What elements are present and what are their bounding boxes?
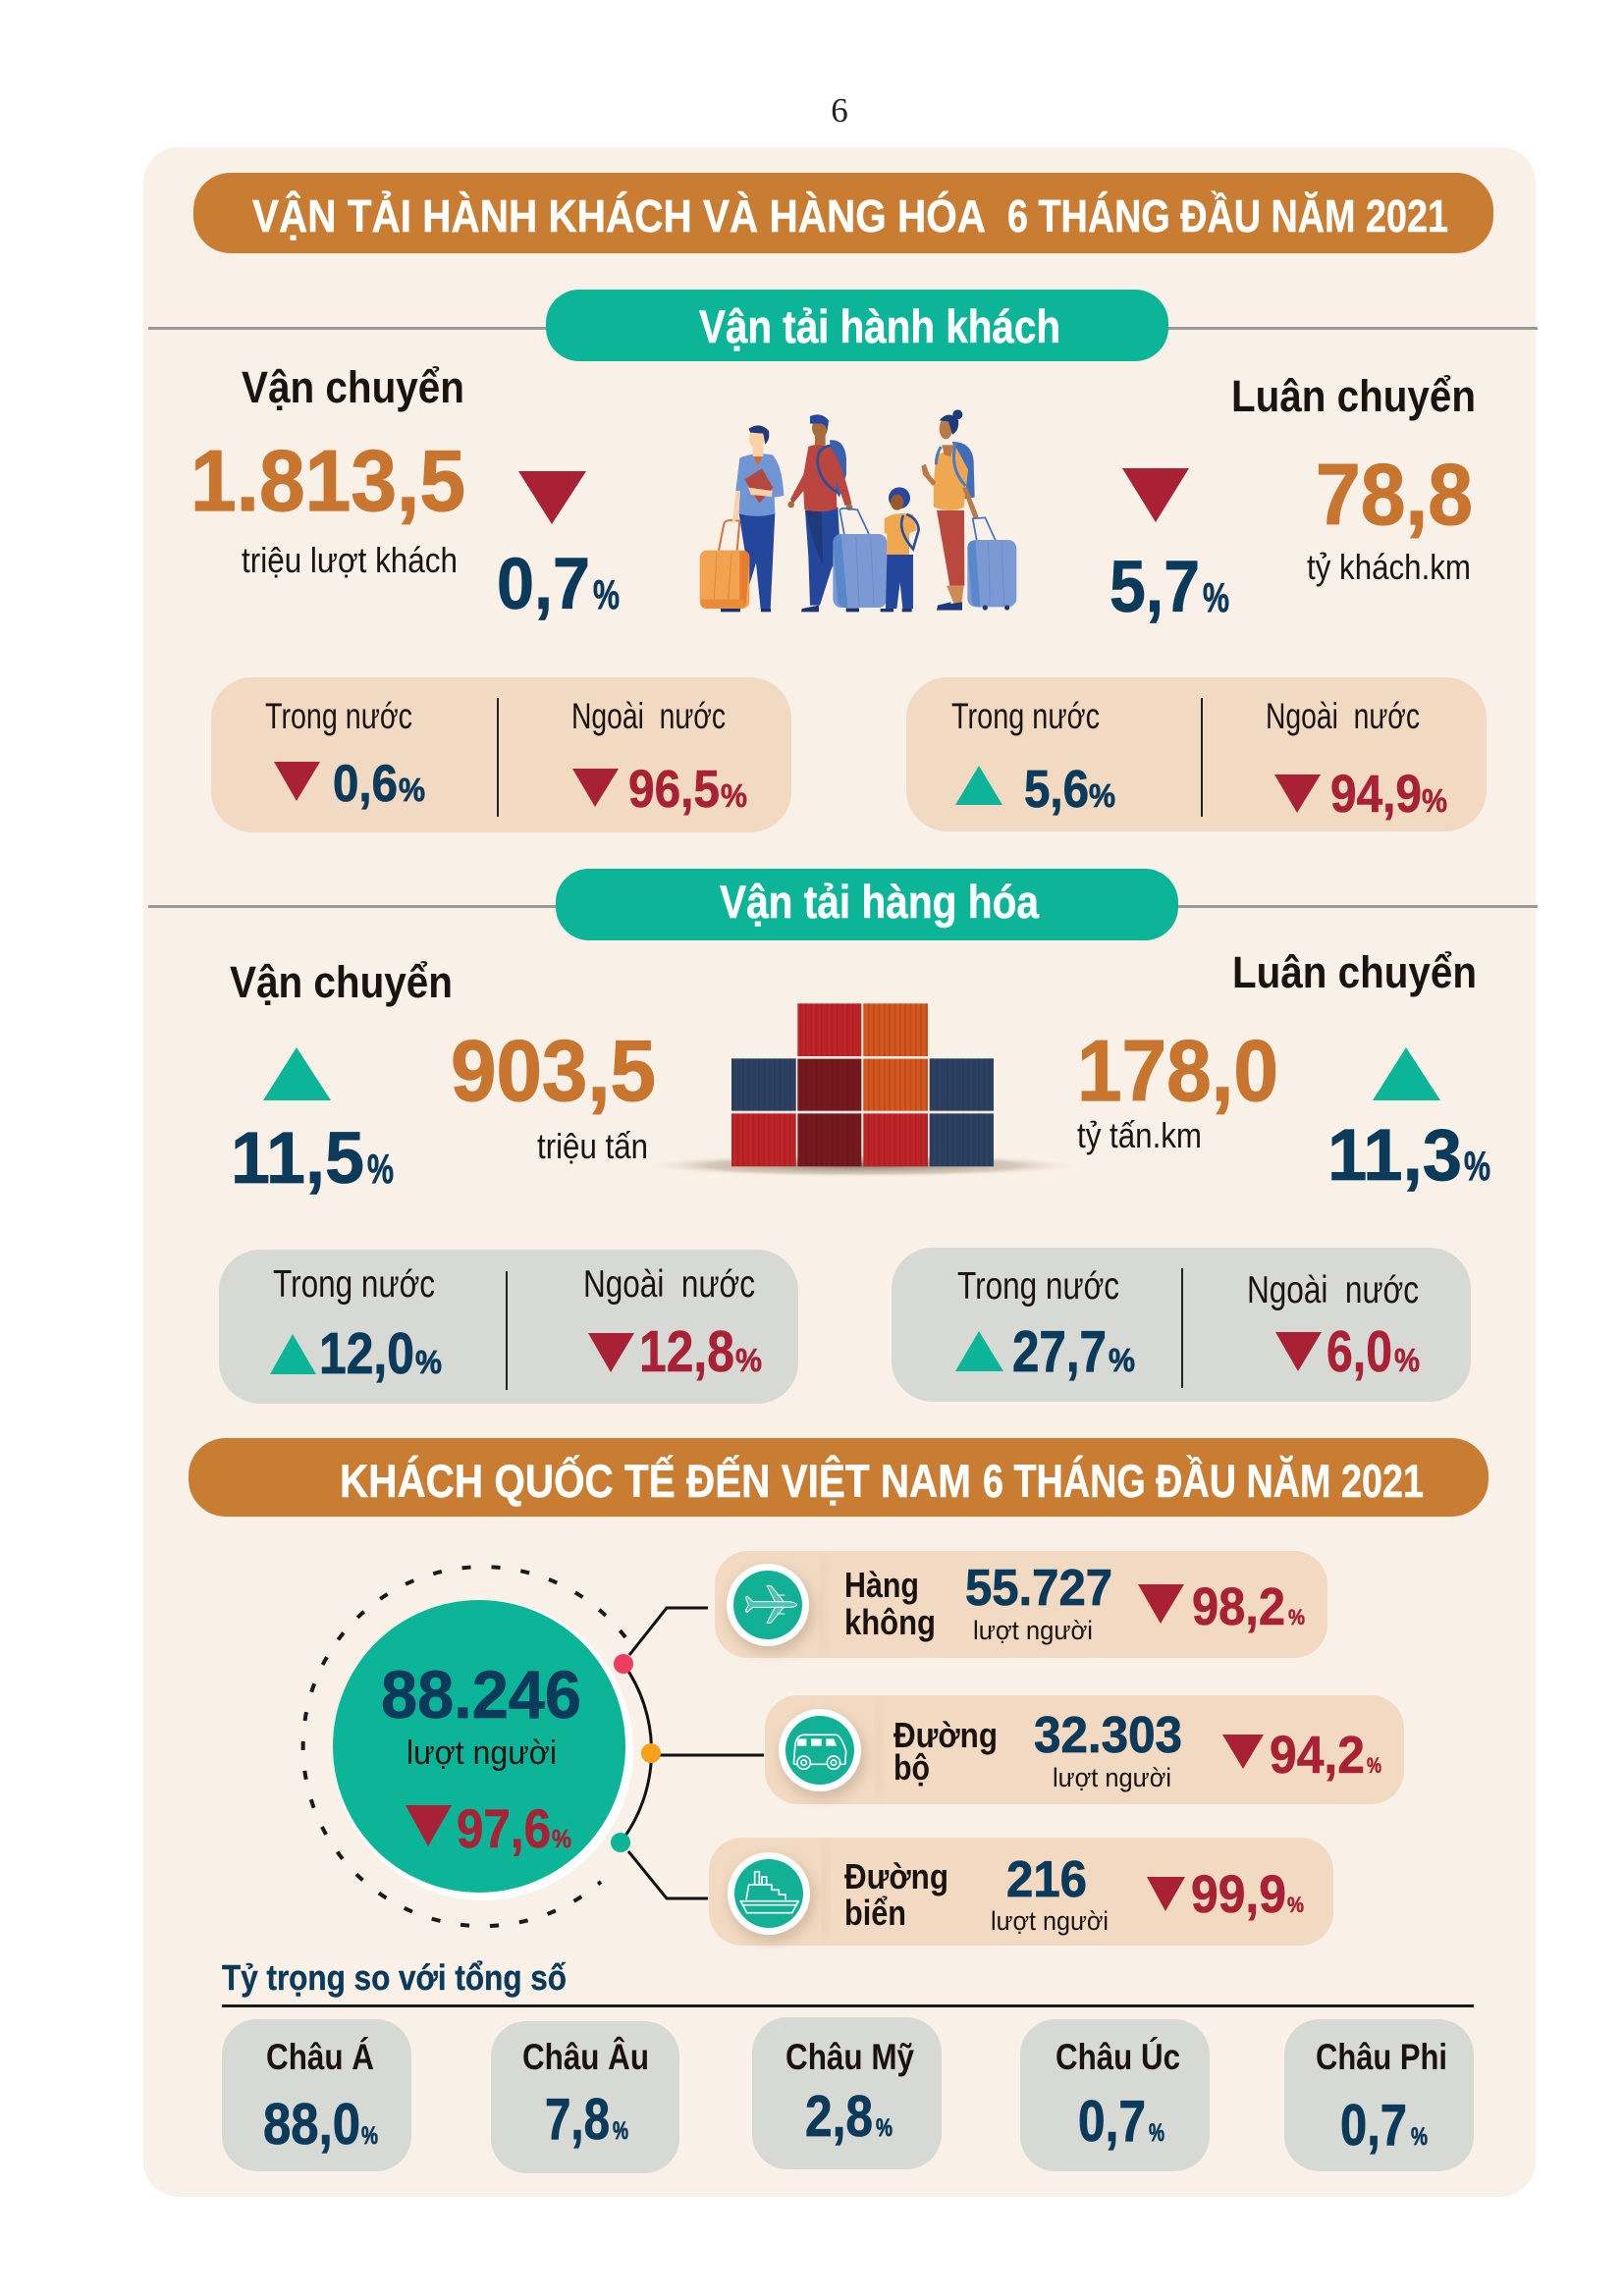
panel: sea transport: lượt người [991,1906,1109,1936]
chart: total visitors circle with connectors: % [552,1824,571,1853]
panel: sea transport: 99,9 [1191,1865,1286,1924]
panel: passenger carriage domestic/foreign [211,677,791,832]
panel: sea transport: % [1287,1893,1304,1917]
illustration: travellers [700,409,1016,612]
panel: freight rotation domestic/foreign: Ngoài nước [1247,1269,1419,1311]
subheading: share of total [222,1957,1474,2007]
panel: passenger rotation domestic/foreign: % [1422,782,1447,819]
panel: passenger carriage domestic/foreign: Trong nước [265,696,412,736]
panel: air transport: Hàng [844,1565,919,1605]
passenger rotation block: tỷ khách.km [1307,547,1471,587]
freight rotation block: Luân chuyển [1232,947,1477,997]
passenger rotation block: 5,7 [1110,546,1200,627]
panel: background [143,147,1536,2197]
panel: freight rotation domestic/foreign [892,1248,1471,1402]
panel: air transport: lượt người [973,1616,1093,1645]
panel: freight carriage domestic/foreign: 12,0 [319,1321,414,1386]
passenger carriage block: triệu lượt khách [242,540,458,580]
freight rotation block: % [1464,1143,1490,1189]
card: Americas: 2,8 [805,2084,873,2149]
freight carriage block [230,957,656,1199]
panel: freight carriage domestic/foreign [219,1250,798,1404]
panel: freight rotation domestic/foreign: Trong nước [957,1265,1119,1308]
passenger rotation block: Luân chuyển [1231,371,1476,421]
panel: air transport: không [844,1602,936,1642]
card: Asia [222,2019,411,2171]
card: Americas [752,2017,942,2169]
heading bar: international visitors [189,1438,1489,1517]
panel: passenger rotation domestic/foreign: % [1089,777,1115,814]
panel: sea transport: 216 [1006,1851,1087,1908]
card: Europe [491,2021,679,2173]
panel: passenger rotation domestic/foreign [906,677,1487,831]
panel: road transport: bộ [893,1747,930,1788]
passenger carriage block: Vận chuyển [242,362,464,412]
panel: passenger carriage domestic/foreign: Ngoài nước [571,696,726,736]
freight rotation block [1077,947,1490,1196]
panel: freight carriage domestic/foreign: 12,8 [639,1319,734,1384]
section header: passenger transport: Vận tải hành khách [699,300,1060,352]
panel: freight rotation domestic/foreign: 6,0 [1326,1319,1392,1384]
passenger carriage block: % [593,571,620,617]
card: Asia: Châu Á [266,2037,374,2077]
freight carriage block: Vận chuyển [230,957,453,1007]
card: Europe: 7,8 [545,2087,610,2152]
icon: ship [740,1872,798,1913]
card: Asia: 88,0 [263,2092,360,2157]
card: Americas: Châu Mỹ [785,2037,914,2077]
panel: sea transport: Đường [844,1856,948,1896]
passenger carriage block [190,362,620,624]
panel: road transport: 32.303 [1034,1707,1182,1764]
panel: freight rotation domestic/foreign: 27,7 [1012,1319,1107,1384]
freight carriage block: % [367,1146,394,1192]
panel: sea transport: biển [844,1893,906,1933]
card: Africa [1284,2019,1474,2171]
chart: total visitors circle with connectors: 88.246 [381,1657,581,1733]
panel: road transport: lượt người [1053,1763,1171,1792]
card: Americas: % [876,2114,893,2142]
card: Oceania: Châu Úc [1056,2036,1180,2077]
panel: passenger rotation domestic/foreign: Trong nước [951,696,1100,736]
panel: freight rotation domestic/foreign: % [1394,1342,1420,1378]
panel: air transport: 98,2 [1192,1577,1285,1636]
icon: van [793,1735,846,1769]
title bar: VẬN TẢI HÀNH KHÁCH VÀ HÀNG HÓA [252,190,986,241]
card: Europe: Châu Âu [522,2036,649,2077]
section header: freight transport [148,869,1538,940]
panel: freight rotation domestic/foreign: % [1109,1342,1135,1378]
section header: freight transport: Vận tải hàng hóa [720,876,1040,928]
subheading: share of total: Tỷ trọng so với tổng số [222,1957,567,1998]
heading bar: international visitors: KHÁCH QUỐC TẾ ĐẾN VIỆT NAM [340,1455,971,1507]
panel: passenger rotation domestic/foreign: 5,6 [1024,760,1089,819]
title bar: 6 THÁNG ĐẦU NĂM 2021 [1007,190,1448,241]
panel: road transport: % [1367,1753,1381,1778]
chart: total visitors circle with connectors [303,1567,764,1926]
panel: passenger rotation domestic/foreign: 94,9 [1330,765,1422,824]
panel: air transport [715,1551,1327,1658]
panel: freight carriage domestic/foreign: Ngoài nước [583,1263,755,1306]
panel: passenger carriage domestic/foreign: 0,6 [333,755,398,813]
card: Africa: Châu Phi [1316,2037,1447,2077]
chart: total visitors circle with connectors: 97,6 [457,1797,551,1859]
panel: air transport: % [1288,1605,1305,1629]
title bar [193,173,1493,253]
panel: freight carriage domestic/foreign: % [735,1342,762,1378]
section header: passenger transport [148,290,1538,361]
freight rotation block: 11,3 [1327,1114,1462,1196]
panel: air transport: 55.727 [965,1560,1112,1617]
card: Asia: % [361,2122,378,2150]
passenger rotation block: % [1203,574,1229,620]
panel: road transport: 94,2 [1270,1726,1365,1785]
panel: passenger carriage domestic/foreign: % [399,772,425,808]
chart: total visitors circle with connectors: lượt người [406,1735,557,1772]
panel: passenger rotation domestic/foreign: Ngoài nước [1266,696,1420,736]
passenger rotation block [1110,371,1476,627]
heading bar: international visitors: 6 THÁNG ĐẦU NĂM 2021 [983,1455,1424,1507]
panel: passenger carriage domestic/foreign: 96,5 [628,760,720,819]
freight carriage block: triệu tấn [537,1126,648,1166]
card: Oceania: 0,7 [1078,2089,1146,2154]
card: Oceania: % [1149,2119,1164,2147]
card: Africa: 0,7 [1340,2093,1407,2158]
panel: freight carriage domestic/foreign: Trong nước [273,1263,435,1306]
passenger rotation block: 78,8 [1316,446,1473,543]
passenger carriage block: 1.813,5 [190,432,465,529]
panel: road transport [765,1695,1404,1804]
panel: sea transport [709,1838,1333,1946]
icon: airplane [745,1585,797,1623]
card: Africa: % [1411,2123,1428,2151]
freight rotation block: 178,0 [1077,1022,1278,1119]
page number: 6 [831,91,848,130]
panel: road transport: Đường [893,1715,998,1755]
illustration: stacked containers [640,1003,1085,1177]
card: Oceania [1020,2019,1210,2171]
freight carriage block: 903,5 [451,1022,656,1119]
card: Europe: % [613,2117,628,2145]
panel: freight carriage domestic/foreign: % [415,1344,442,1380]
panel: passenger carriage domestic/foreign: % [721,777,747,814]
freight carriage block: 11,5 [231,1117,364,1199]
freight rotation block: tỷ tấn.km [1077,1115,1202,1155]
passenger carriage block: 0,7 [497,543,590,624]
